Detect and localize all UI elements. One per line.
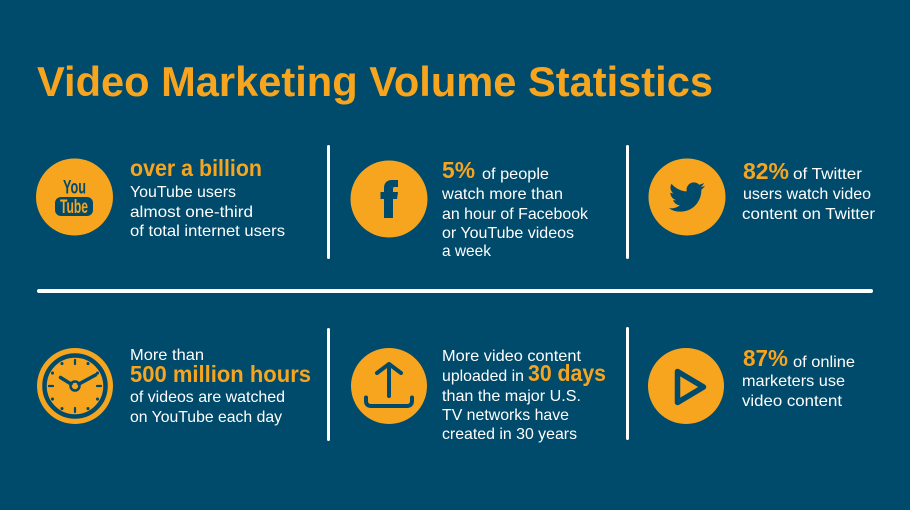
text: 30 days: uploaded in [442, 368, 524, 385]
text: 5% of people: watch more than [441, 186, 563, 203]
text: 500 million hours: More than [130, 347, 204, 364]
panel: Twitter users [648, 158, 876, 236]
text: over a billion: almost one-third [130, 204, 253, 221]
text: 500 million hours: on YouTube each day [130, 409, 282, 426]
text: 87% of online marketers: video content [742, 393, 843, 410]
text: 82% of Twitter users [742, 158, 876, 223]
text: 87% of online marketers [742, 345, 855, 410]
text: over a billion: over a billion [130, 155, 262, 181]
text: 500 million hours: 500 million hours [130, 361, 311, 387]
panel: marketers using video [648, 345, 855, 424]
text: 87% of online marketers: 87% [743, 345, 788, 371]
text: 5% of people: a week [442, 243, 492, 260]
icon: YouTube [36, 158, 113, 236]
panel: content uploaded [351, 348, 606, 443]
icon: YouTube: You [63, 178, 86, 198]
icon: play [648, 348, 724, 424]
text: 82% of Twitter users: content on Twitter [742, 206, 876, 223]
text: 5% of people: or YouTube videos [442, 225, 574, 242]
icon: clock [37, 348, 113, 424]
text: 82% of Twitter users: 82% [743, 158, 789, 184]
text: 82% of Twitter users: of Twitter [793, 166, 863, 183]
icon: upload [351, 348, 427, 424]
icon: Twitter bird [648, 158, 726, 236]
text: 30 days: More video content [442, 348, 582, 365]
text: 500 million hours [130, 347, 311, 426]
text: over a billion [130, 155, 285, 240]
text: over a billion: of total internet users [130, 223, 285, 240]
text: 5% of people: an hour of Facebook [442, 206, 589, 223]
text: 87% of online marketers: of online [793, 354, 855, 371]
text: 87% of online marketers: marketers use [742, 373, 845, 390]
panel: hours watched [37, 347, 311, 426]
text: 30 days: than the major U.S. [442, 388, 581, 405]
text: 30 days: 30 days [528, 360, 606, 386]
text: 500 million hours: of videos are watched [130, 389, 285, 406]
panel: YouTube users [36, 155, 285, 240]
text: 82% of Twitter users: users watch video [743, 186, 871, 203]
text: 30 days: TV networks have [442, 407, 569, 424]
text: 5% of people: of people [482, 166, 549, 183]
text: 30 days: created in 30 years [442, 426, 577, 443]
icon: Facebook [350, 160, 428, 238]
title: Video Marketing Volume Statistics [37, 58, 713, 105]
text: 30 days [442, 348, 606, 443]
panel: Facebook viewing [350, 157, 589, 260]
text: over a billion: YouTube users [130, 184, 236, 201]
icon: YouTube: Tube [60, 197, 88, 218]
text: 5% of people: 5% [442, 157, 475, 183]
text: 5% of people [441, 157, 589, 260]
